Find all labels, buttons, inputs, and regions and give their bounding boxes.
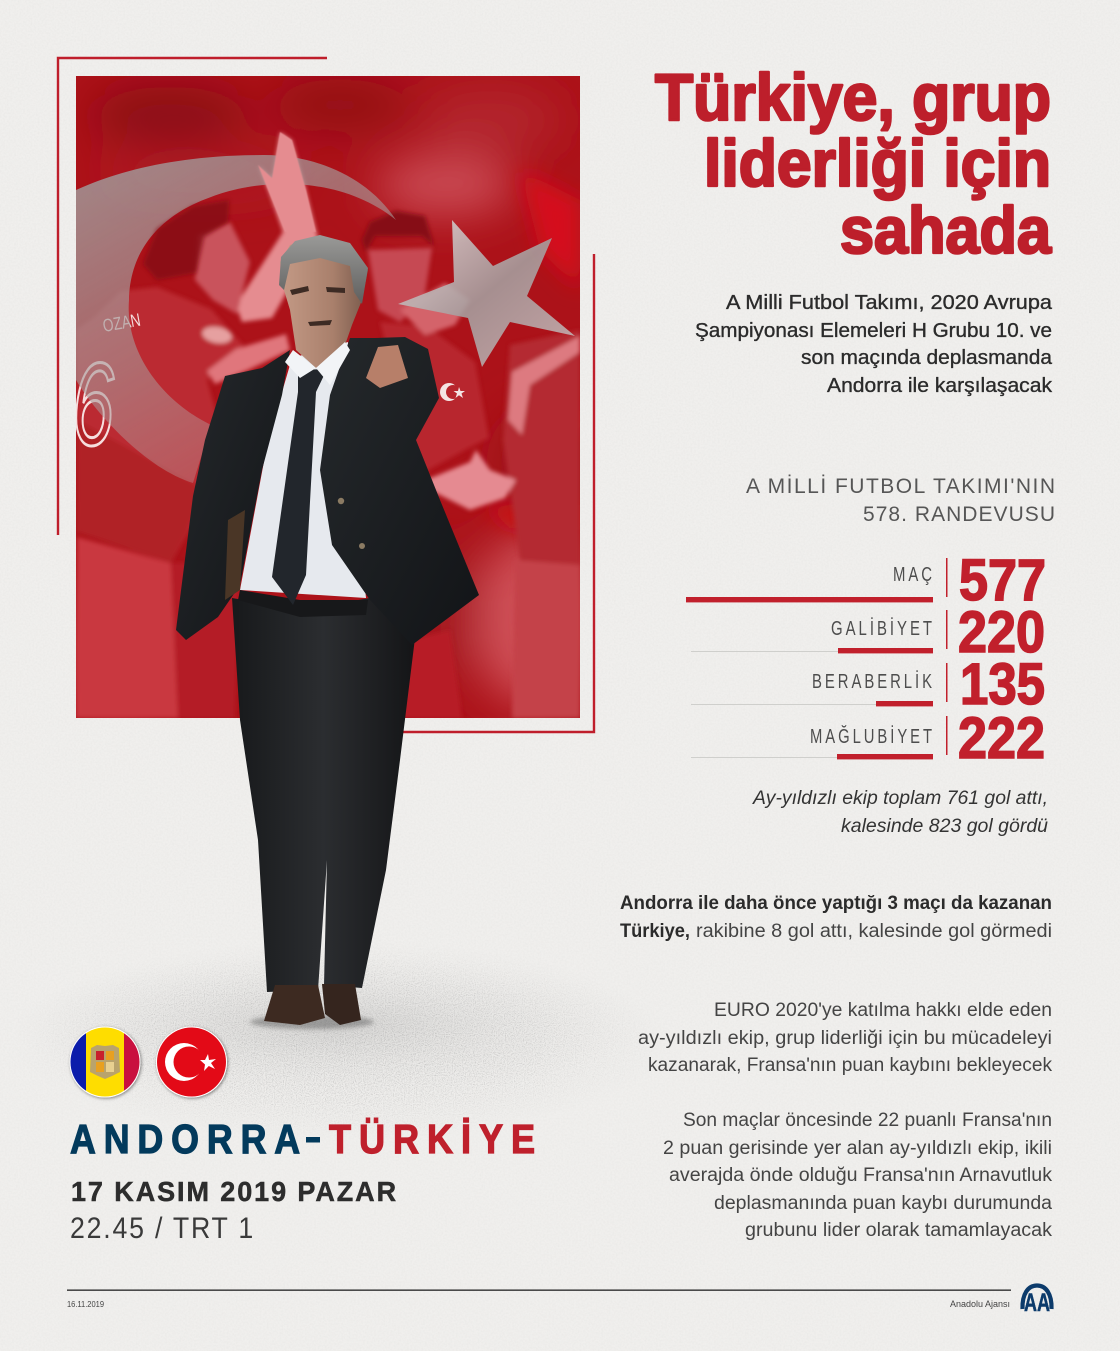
- intro paragraph: Şampiyonası Elemeleri H Grubu 10. ve: [695, 320, 1052, 342]
- France standings paragraph: [663, 1110, 1053, 1241]
- qualification paragraph: [638, 1000, 1053, 1076]
- title: [655, 60, 1052, 267]
- stat: beraberlik: 135: [960, 652, 1045, 717]
- pointing hand: [366, 345, 408, 388]
- left player raised arm: [236, 132, 318, 322]
- left player hands over crescent: [258, 132, 316, 232]
- grey crescent overlay: [76, 155, 396, 483]
- footer date: 16.11.2019: [67, 1299, 104, 1309]
- players, softly blurred: [76, 132, 580, 718]
- stat: mağlubiyet: 222: [958, 706, 1045, 771]
- icon: Andorra flag: [70, 1026, 140, 1098]
- jersey name and number: OZAN: [101, 310, 142, 336]
- stat: maç: MAÇ: [893, 564, 935, 586]
- France standings paragraph: Son maçlar öncesinde 22 puanlı Fransa'nın: [683, 1110, 1052, 1131]
- title: Türkiye, grup: [655, 60, 1051, 134]
- trousers: [232, 598, 415, 992]
- red corner frame, bottom right: [397, 254, 594, 732]
- left player hair over crescent: [143, 200, 229, 280]
- stat table: [686, 548, 1046, 771]
- right player face: [368, 248, 432, 322]
- stat: galibiyet: [691, 600, 1045, 665]
- section heading: [746, 475, 1055, 526]
- icon: AA logo: AA: [1024, 1289, 1050, 1317]
- match title: TÜRKİYE: [329, 1116, 543, 1162]
- stat: galibiyet: GALİBİYET: [831, 617, 935, 640]
- qualification paragraph: EURO 2020'ye katılma hakkı elde eden: [714, 1000, 1052, 1021]
- Andorra record paragraph: rakibine 8 gol attı, kalesinde gol görmedi: [696, 921, 1052, 942]
- goals note: kalesinde 823 gol gördü: [841, 816, 1048, 837]
- belt: [238, 590, 368, 617]
- grey star overlay: [398, 220, 575, 367]
- France standings paragraph: averajda önde olduğu Fransa'nın Arnavutluk: [669, 1165, 1053, 1186]
- left player horizontal arm: [207, 334, 290, 384]
- neck and head: [280, 236, 368, 368]
- blurred crowd: [70, 79, 585, 710]
- France standings paragraph: grubunu lider olarak tamamlayacak: [745, 1220, 1053, 1241]
- collar: [285, 342, 350, 385]
- Andorra record paragraph: [620, 893, 1052, 942]
- left player shorts: [76, 537, 178, 718]
- stat: beraberlik: BERABERLİK: [812, 670, 935, 693]
- icon: AA logo: [1022, 1286, 1052, 1317]
- goals note: Ay-yıldızlı ekip toplam 761 gol attı,: [752, 788, 1048, 809]
- section heading: A MİLLİ FUTBOL TAKIMI'NIN: [746, 475, 1055, 498]
- title: liderliği için: [704, 126, 1051, 200]
- stat: galibiyet: 220: [958, 600, 1045, 665]
- icon: Turkish flag: [156, 1026, 227, 1098]
- stat: maç: 577: [959, 548, 1046, 613]
- sleeve badge: [201, 325, 233, 345]
- right player jersey: [380, 322, 489, 474]
- section heading: 578. RANDEVUSU: [863, 503, 1055, 526]
- Andorra record paragraph: Türkiye,: [620, 921, 690, 942]
- paper background: [36, 948, 642, 1132]
- intro paragraph: Andorra ile karşılaşacak: [827, 375, 1053, 397]
- jacket left side: [176, 350, 290, 640]
- qualification paragraph: kazanarak, Fransa'nın puan kaybını bekleyecek: [648, 1055, 1053, 1076]
- shoes: [264, 985, 325, 1025]
- footer agency: Anadolu Ajansı: [950, 1299, 1010, 1309]
- match title: ANDORRA: [70, 1116, 308, 1162]
- brown inner jacket fold: [225, 510, 245, 600]
- jacket buttons: [338, 498, 344, 504]
- hair: [279, 235, 368, 304]
- title: sahada: [840, 193, 1052, 267]
- qualification paragraph: ay-yıldızlı ekip, grup liderliği için bu mücadeleyi: [638, 1028, 1052, 1049]
- stat: mağlubiyet: [691, 706, 1045, 771]
- goals note: [752, 788, 1048, 837]
- stat: maç: [686, 548, 1046, 613]
- red corner frame, top left: [58, 58, 327, 535]
- tie: [272, 369, 327, 605]
- footer rule: [67, 1290, 1011, 1291]
- match date: 17 KASIM 2019 PAZAR: [71, 1176, 398, 1207]
- jersey crescent emblem: [440, 383, 465, 401]
- Andorra record paragraph: Andorra ile daha önce yaptığı 3 maçı da kazanan: [620, 893, 1052, 914]
- match title: [70, 1116, 543, 1162]
- bright flag streaks: [480, 170, 580, 530]
- left player jersey: [76, 287, 243, 563]
- intro paragraph: son maçında deplasmanda: [801, 347, 1053, 369]
- eyes and brow: [290, 286, 345, 326]
- right far player: [502, 330, 580, 564]
- stat: beraberlik: [691, 652, 1045, 717]
- stat: mağlubiyet: MAĞLUBİYET: [810, 725, 935, 748]
- match time and channel: 22.45 / TRT 1: [70, 1212, 255, 1245]
- left player face: [195, 222, 250, 314]
- intro paragraph: A Milli Futbol Takımı, 2020 Avrupa: [726, 292, 1053, 314]
- France standings paragraph: 2 puan gerisinde yer alan ay-yıldızlı ekip, ikili: [663, 1138, 1052, 1159]
- shirt: [240, 342, 366, 598]
- right player hands: [421, 450, 516, 510]
- panel: red photo background with players: [70, 76, 585, 718]
- jersey name and number: 6: [72, 339, 114, 471]
- figure: coach pointing: [176, 235, 479, 1025]
- France standings paragraph: deplasmanında puan kaybı durumunda: [714, 1193, 1052, 1214]
- intro paragraph: [695, 292, 1053, 397]
- jacket right side and sleeve: [320, 337, 479, 645]
